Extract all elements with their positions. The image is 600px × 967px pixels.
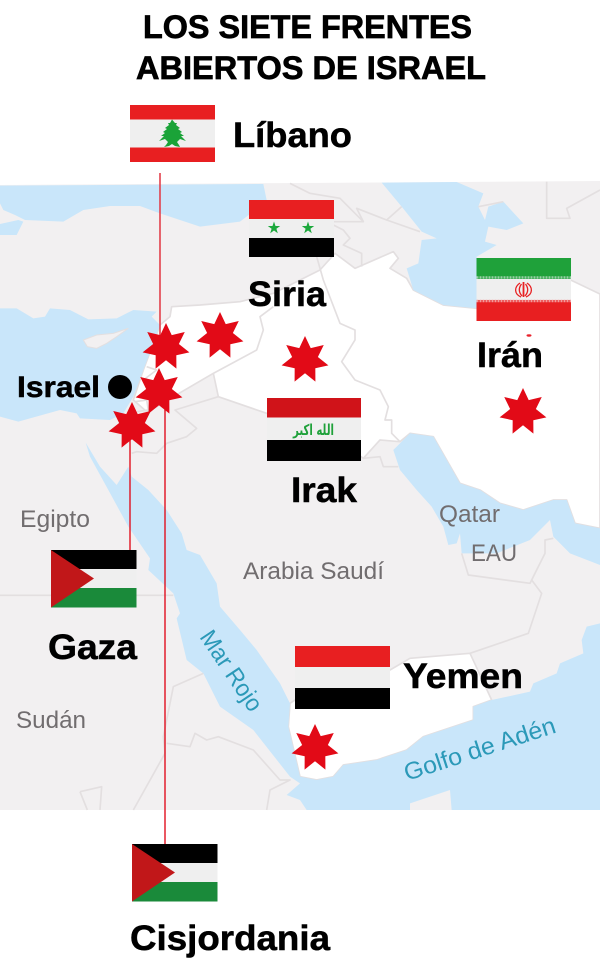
star: Líbano [143, 323, 189, 369]
label: Egipto: Egipto [20, 506, 90, 533]
flag: Irak [267, 398, 361, 461]
star: Irán [500, 388, 546, 434]
label: Golfo de Adén: Golfo de Adén [401, 712, 559, 787]
label: Irak: Irak [291, 471, 358, 510]
label: Líbano: Líbano [233, 116, 352, 155]
sea: Mar Negro [0, 184, 267, 235]
label: Siria: Siria [248, 275, 327, 314]
sea: Caspio [382, 182, 523, 308]
title [136, 9, 486, 86]
star: Irak [282, 336, 328, 382]
star: Siria [197, 312, 243, 358]
line: Gaza [129, 430, 131, 550]
map [0, 181, 600, 810]
star: Cisjordania [136, 368, 182, 414]
title: LOS SIETE FRENTES [143, 9, 472, 45]
sea: Golfo Pérsico [393, 433, 600, 565]
star: Gaza [109, 402, 155, 448]
label: Mar Rojo: Mar Rojo [194, 625, 268, 717]
flag: Cisjordania [132, 844, 218, 902]
title: ABIERTOS DE ISRAEL [136, 50, 486, 86]
label: EAU: EAU [471, 540, 517, 567]
sea: Mediterráneo [0, 308, 160, 422]
label: Arabia Saudí: Arabia Saudí [243, 558, 384, 585]
highlighted country: Yemen [288, 653, 492, 780]
flag: Yemen [295, 646, 390, 709]
label: Yemen: Yemen [403, 657, 523, 696]
country borders [0, 182, 600, 810]
label: Qatar: Qatar [439, 501, 500, 528]
label: Cisjordania: Cisjordania [130, 919, 331, 958]
line: Líbano [159, 173, 161, 345]
flag: Irán [476, 258, 571, 321]
marker: Israel [108, 375, 132, 399]
label: Irán: Irán [477, 336, 543, 375]
flag: Gaza [51, 550, 136, 608]
label: Sudán: Sudán [16, 707, 86, 734]
label: Gaza: Gaza [48, 628, 138, 667]
land base [0, 181, 600, 810]
sea: Mar Rojo y Golfo de Adén [86, 443, 600, 810]
flag: Irak: الله اكبر [292, 421, 334, 439]
highlighted countries: Siria, Líbano, Irak, Irán [133, 252, 600, 528]
line: Cisjordania [164, 395, 166, 844]
flag: Líbano [130, 105, 215, 162]
label: Israel: Israel [17, 371, 100, 404]
island: Chipre [83, 328, 128, 348]
accent mark [526, 334, 532, 337]
star: Yemen [292, 724, 338, 770]
flag: Siria [249, 200, 334, 257]
